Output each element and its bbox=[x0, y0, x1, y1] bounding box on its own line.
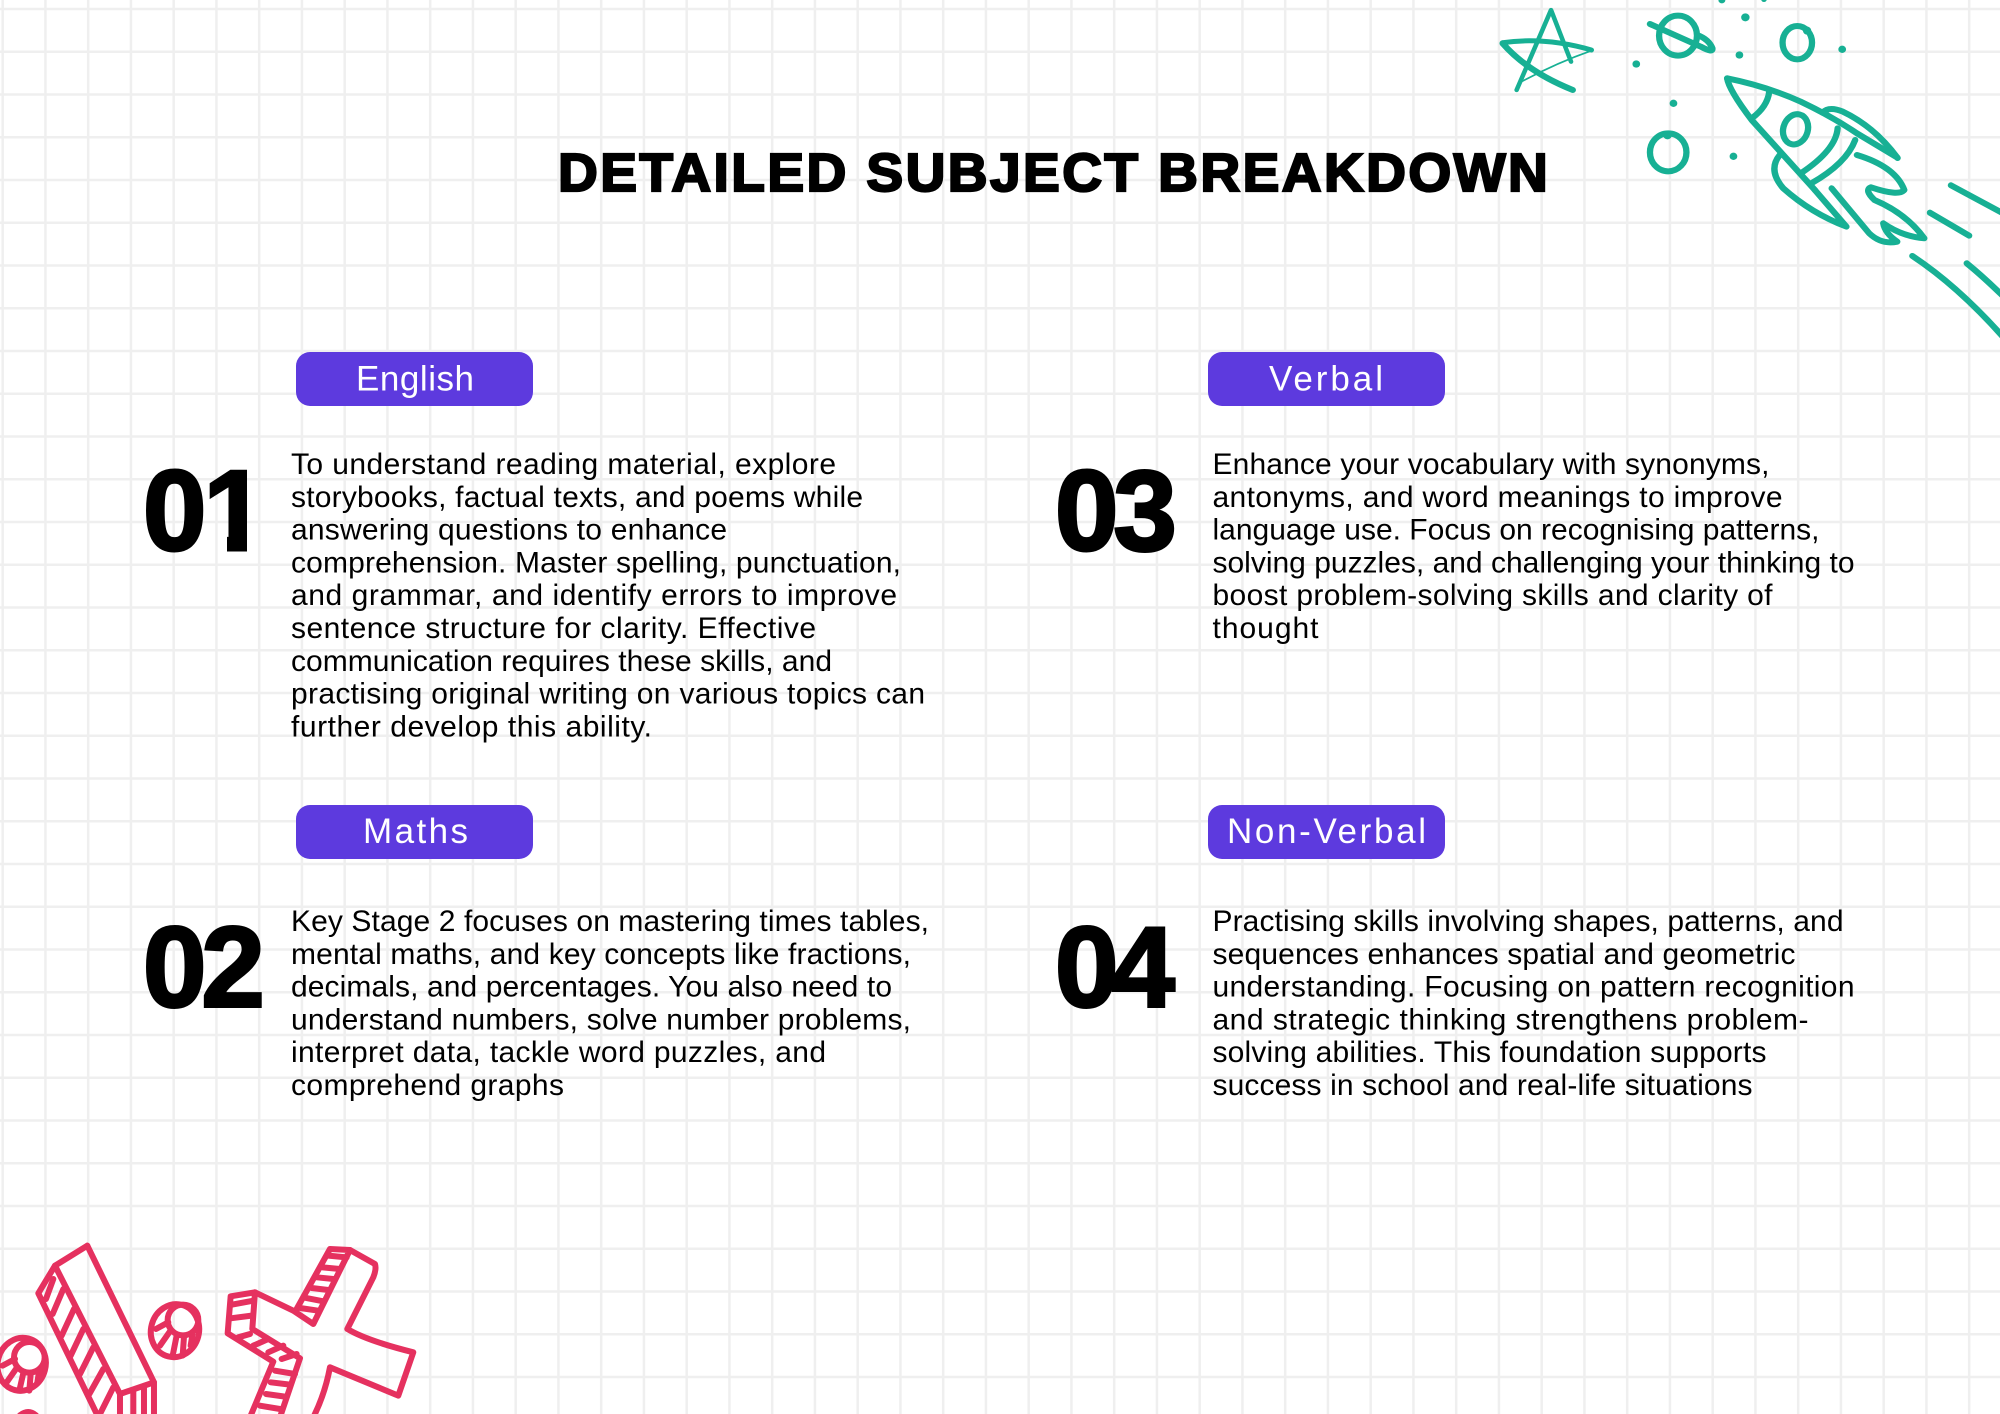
badge: Non-Verbal bbox=[1208, 805, 1445, 859]
number: 01: 01 bbox=[143, 448, 264, 575]
text: English description: practising original writing on various topics can bbox=[291, 678, 925, 711]
icon: small rings and dots bbox=[1632, 0, 1846, 171]
text: Maths description: Key Stage 2 focuses on mastering times tables, bbox=[291, 905, 929, 938]
illustration: maths symbols bbox=[0, 1246, 413, 1414]
icon: rocket bbox=[1727, 78, 1924, 242]
text: Maths description bbox=[291, 905, 929, 1102]
text: Non-Verbal description: understanding. Focusing on pattern recognition bbox=[1212, 971, 1854, 1004]
text: Verbal description bbox=[1212, 448, 1854, 645]
text: English description: sentence structure for clarity. Effective bbox=[291, 612, 816, 645]
icon: star bbox=[1503, 10, 1591, 90]
panel: Non-Verbal bbox=[1055, 805, 1854, 1102]
text: Verbal description: solving puzzles, and challenging your thinking to bbox=[1212, 546, 1854, 579]
text: English description: storybooks, factual texts, and poems while bbox=[291, 481, 863, 514]
number: 04: 04 bbox=[1055, 904, 1174, 1032]
text: Non-Verbal description: and strategic thinking strengthens problem- bbox=[1212, 1003, 1808, 1036]
badge: Maths: Maths bbox=[363, 812, 468, 851]
badge: English: English bbox=[356, 360, 474, 398]
text: English description bbox=[291, 448, 925, 743]
text: English description: To understand reading material, explore bbox=[291, 448, 836, 481]
badge: Verbal bbox=[1208, 352, 1445, 406]
text: English description: communication requires these skills, and bbox=[291, 645, 832, 678]
text: Maths description: decimals, and percentages. You also need to bbox=[291, 971, 892, 1004]
number: 03: 03 bbox=[1055, 448, 1173, 575]
badge: Maths bbox=[296, 805, 533, 859]
text: Verbal description: thought bbox=[1212, 612, 1319, 645]
badge: English bbox=[296, 352, 533, 406]
panel: English bbox=[143, 352, 925, 743]
text: Non-Verbal description: Practising skills involving shapes, patterns, and bbox=[1212, 905, 1844, 938]
panel: Maths bbox=[143, 805, 929, 1102]
text: Maths description: interpret data, tackle word puzzles, and bbox=[291, 1036, 826, 1069]
badge: Non-Verbal: Non-Verbal bbox=[1227, 812, 1426, 851]
text: Maths description: mental maths, and key concepts like fractions, bbox=[291, 938, 911, 971]
illustration: rocket and space doodles bbox=[1503, 0, 2000, 338]
text: English description: and grammar, and identify errors to improve bbox=[291, 579, 897, 612]
text: Maths description: understand numbers, solve number problems, bbox=[291, 1003, 911, 1036]
text: Verbal description: antonyms, and word meanings to improve bbox=[1212, 481, 1782, 514]
text: Verbal description: language use. Focus on recognising patterns, bbox=[1212, 514, 1820, 547]
icon: ringed planet bbox=[1650, 16, 1712, 56]
text: English description: comprehension. Master spelling, punctuation, bbox=[291, 546, 901, 579]
text: Non-Verbal description bbox=[1212, 905, 1854, 1102]
panel: Verbal bbox=[1055, 352, 1854, 645]
text: English description: answering questions to enhance bbox=[291, 514, 727, 547]
text: Verbal description: Enhance your vocabulary with synonyms, bbox=[1212, 448, 1770, 481]
icon: division sign bbox=[0, 1246, 205, 1414]
text: Non-Verbal description: solving abilities. This foundation supports bbox=[1212, 1036, 1766, 1069]
text: Non-Verbal description: sequences enhances spatial and geometric bbox=[1212, 938, 1796, 971]
icon: speed lines bbox=[1912, 185, 2000, 338]
title: DETAILED SUBJECT BREAKDOWN bbox=[558, 143, 1548, 203]
text: English description: further develop this ability. bbox=[291, 710, 652, 743]
text: Non-Verbal description: success in school and real-life situations bbox=[1212, 1069, 1752, 1102]
badge: Verbal: Verbal bbox=[1269, 360, 1383, 398]
number: 02: 02 bbox=[143, 904, 260, 1032]
icon: multiplication sign bbox=[228, 1249, 413, 1414]
text: Maths description: comprehend graphs bbox=[291, 1069, 564, 1102]
text: Verbal description: boost problem-solving skills and clarity of bbox=[1212, 579, 1773, 612]
